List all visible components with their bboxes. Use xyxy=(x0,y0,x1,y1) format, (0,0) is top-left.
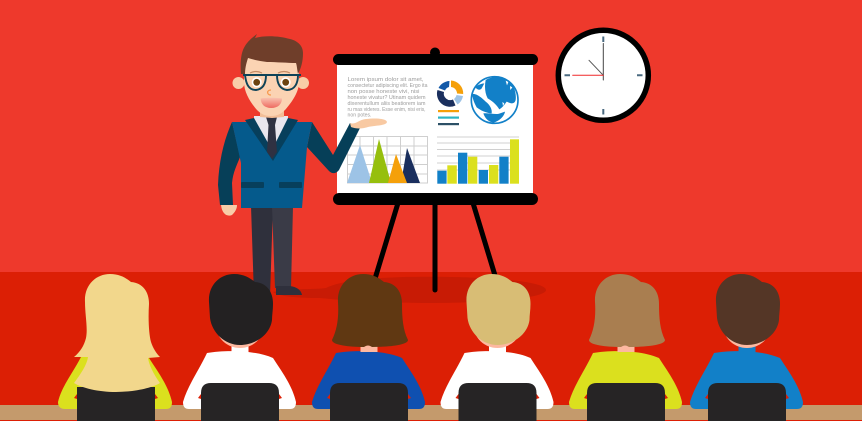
bottom bar xyxy=(333,193,538,205)
mouth xyxy=(261,98,282,108)
bench xyxy=(0,405,862,420)
legend lines xyxy=(438,110,459,125)
easel legs xyxy=(374,203,497,290)
ears xyxy=(232,77,309,89)
audience member: blonde woman xyxy=(58,274,172,421)
pointing hand xyxy=(350,118,387,128)
navy peak xyxy=(401,148,420,183)
board sheet xyxy=(337,63,533,194)
audience member: light brown hair woman xyxy=(569,274,682,421)
clock face xyxy=(558,30,648,120)
eyebrows xyxy=(250,72,290,73)
audience member: dark brown hair man xyxy=(690,274,803,421)
eyes xyxy=(252,77,291,87)
audience member: dark hair man xyxy=(183,274,296,421)
donut chart xyxy=(437,80,463,107)
globe icon xyxy=(471,77,518,123)
bar chart grid xyxy=(437,137,519,170)
top knob xyxy=(430,48,440,58)
board text block: honeste vivatur? Utinam quidem xyxy=(348,95,426,101)
board text block: Lorem ipsum dolor sit amet, xyxy=(348,77,424,83)
board text block xyxy=(348,77,428,118)
board text block: non potes. xyxy=(348,112,372,118)
shoe xyxy=(276,286,302,295)
bar chart xyxy=(437,137,519,184)
board text block: dixerentullum aliis beatiorem iam xyxy=(348,101,426,107)
orange peak xyxy=(388,154,407,183)
presentation board xyxy=(333,48,538,290)
audience xyxy=(58,274,803,421)
hour ticks xyxy=(564,36,642,114)
lapels xyxy=(245,118,298,161)
hair xyxy=(241,34,303,74)
mountain chart xyxy=(347,136,428,184)
tie xyxy=(266,117,277,159)
audience member: brown hair woman xyxy=(312,274,425,421)
left hand xyxy=(221,205,237,216)
shirt xyxy=(254,116,288,154)
presenter xyxy=(218,34,387,296)
left arm xyxy=(218,122,240,205)
board text block: consectetur adipiscing elit. Ergo ita xyxy=(348,83,428,89)
board text block: non posse honeste vivi, nisi xyxy=(348,89,420,95)
trousers xyxy=(251,206,293,296)
green peak xyxy=(369,139,391,183)
jacket xyxy=(232,122,312,208)
neck xyxy=(260,105,284,118)
board text block: ru mas videres. Esse enim, nisi eris, xyxy=(348,107,426,113)
pointing arm xyxy=(307,122,360,173)
bars xyxy=(437,139,519,184)
wall clock xyxy=(558,30,648,120)
nose xyxy=(268,90,271,95)
glasses xyxy=(243,75,301,90)
top bar xyxy=(333,54,538,65)
clock hands xyxy=(573,44,603,80)
floor xyxy=(0,272,862,421)
pockets xyxy=(241,182,302,188)
audience member: blond man xyxy=(440,274,554,421)
floor shadow xyxy=(273,277,546,303)
chart grid xyxy=(348,136,428,184)
wall background xyxy=(0,0,862,272)
face xyxy=(244,55,299,116)
light blue peak xyxy=(347,145,372,183)
